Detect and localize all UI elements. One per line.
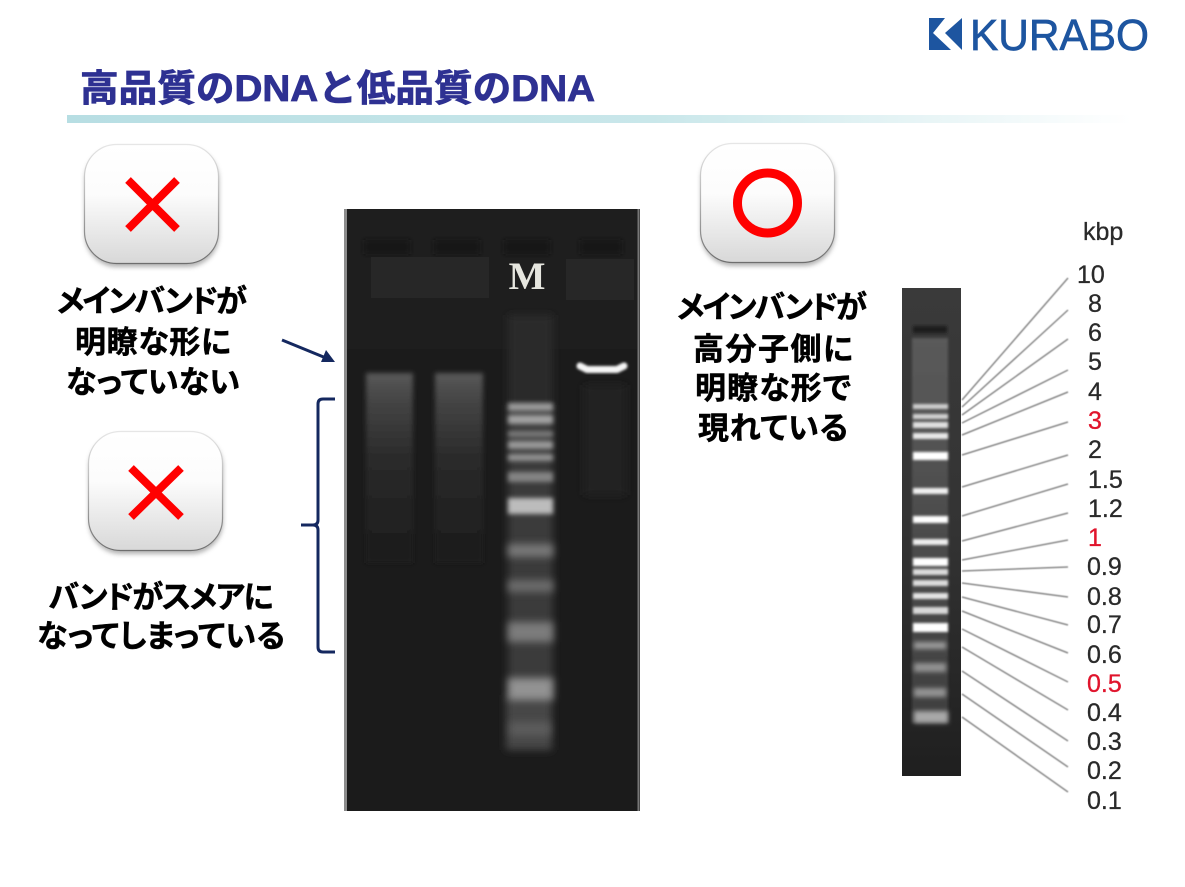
label: main band not clear: メインバンドが <box>57 284 247 319</box>
ladder size labels: 0.1 <box>1087 787 1122 815</box>
label: smear: なってしまっている <box>37 619 285 654</box>
ladder size labels: kbp <box>1083 218 1123 246</box>
button: cross, smear <box>88 432 223 554</box>
high-quality lane band <box>584 385 626 495</box>
title: 高品質のDNAと低品質のDNA <box>80 68 595 109</box>
label: main band clear: 高分子側に <box>693 332 853 367</box>
button: cross, main band <box>84 144 219 267</box>
ladder leader lines <box>962 278 1068 792</box>
DNA ladder gel strip <box>902 288 961 776</box>
label: main band not clear: 明瞭な形に <box>75 325 231 360</box>
marker lane <box>506 315 553 750</box>
bracket: smear region <box>301 399 335 652</box>
label: main band clear: 明瞭な形で <box>695 371 851 406</box>
ladder size labels: 0.9 <box>1087 553 1122 581</box>
ladder size labels: 6 <box>1088 319 1102 347</box>
lane label M: M <box>509 255 545 298</box>
label: main band not clear <box>57 284 247 400</box>
ladder size labels: 0.7 <box>1087 611 1122 639</box>
ladder size labels: 5 <box>1088 348 1102 376</box>
ladder size labels: 1.2 <box>1088 495 1123 523</box>
gel photo: low and high quality DNA <box>344 209 640 811</box>
label: main band clear: 現れている <box>698 411 848 446</box>
ladder bands <box>913 404 948 632</box>
label: smear <box>37 580 285 654</box>
ladder size labels: 0.2 <box>1087 757 1122 785</box>
ladder size labels: 2 <box>1088 436 1102 464</box>
title underline bar <box>67 115 1132 123</box>
arrow to main band <box>282 340 335 362</box>
masked label blocks <box>371 257 489 298</box>
label: main band clear <box>677 290 867 446</box>
ladder size labels <box>1077 218 1123 815</box>
button: circle, good <box>700 144 835 266</box>
ladder size labels: 8 <box>1088 290 1102 318</box>
ladder size labels: 0.6 <box>1087 641 1122 669</box>
ladder size labels: 1.5 <box>1088 466 1123 494</box>
ladder size labels: 0.8 <box>1087 583 1122 611</box>
smear lanes <box>366 373 483 563</box>
label: main band not clear: なっていない <box>66 365 240 400</box>
logo: KURABO: KURABO <box>970 11 1149 60</box>
ladder size labels: 0.3 <box>1087 728 1122 756</box>
ladder size labels: 3 <box>1088 407 1102 435</box>
gel wells <box>364 240 622 254</box>
ladder size labels: 4 <box>1088 378 1102 406</box>
ladder size labels: 0.4 <box>1087 699 1122 727</box>
ladder size labels: 0.5 <box>1087 670 1122 698</box>
ladder size labels: 10 <box>1077 261 1105 289</box>
label: smear: バンドがスメアに <box>48 580 274 615</box>
label: main band clear: メインバンドが <box>677 290 867 325</box>
ladder size labels: 1 <box>1088 524 1102 552</box>
